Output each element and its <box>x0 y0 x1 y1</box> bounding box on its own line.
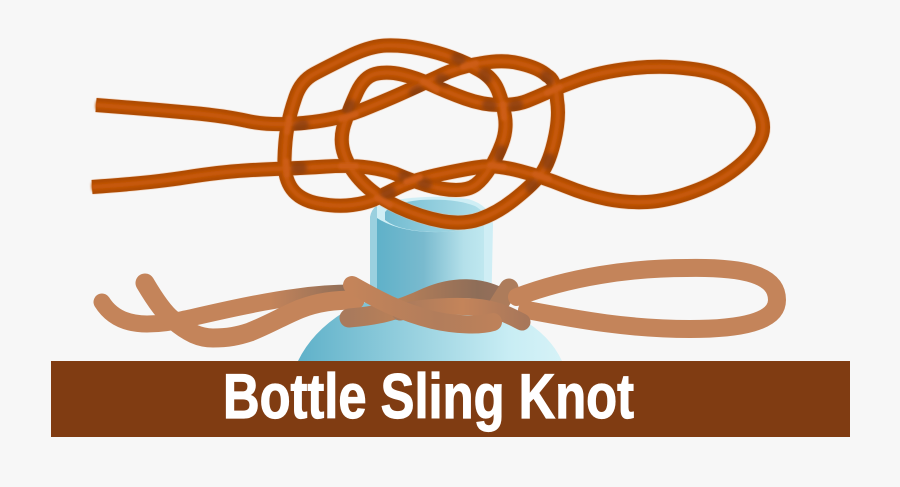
title banner <box>51 361 850 437</box>
right loop <box>517 268 777 329</box>
left strand one <box>102 293 353 324</box>
bottle body <box>298 300 562 361</box>
icon: bottle <box>298 197 562 361</box>
crossing highlights <box>286 63 560 205</box>
front strand <box>352 285 493 324</box>
back strand through knot <box>349 289 500 318</box>
crossing shadows <box>297 58 549 194</box>
upper rope: knot diagram <box>92 45 763 223</box>
lower rope: tied knot on bottle <box>102 268 777 338</box>
infographic canvas <box>51 38 850 437</box>
left strand two <box>145 283 355 338</box>
right knot nub <box>497 288 509 307</box>
bottle opening <box>385 200 484 232</box>
bottle neck <box>370 197 493 320</box>
middle strand <box>400 306 522 322</box>
title: Bottle Sling Knot <box>223 362 634 432</box>
rope halo <box>92 45 763 223</box>
rope body <box>92 45 763 223</box>
